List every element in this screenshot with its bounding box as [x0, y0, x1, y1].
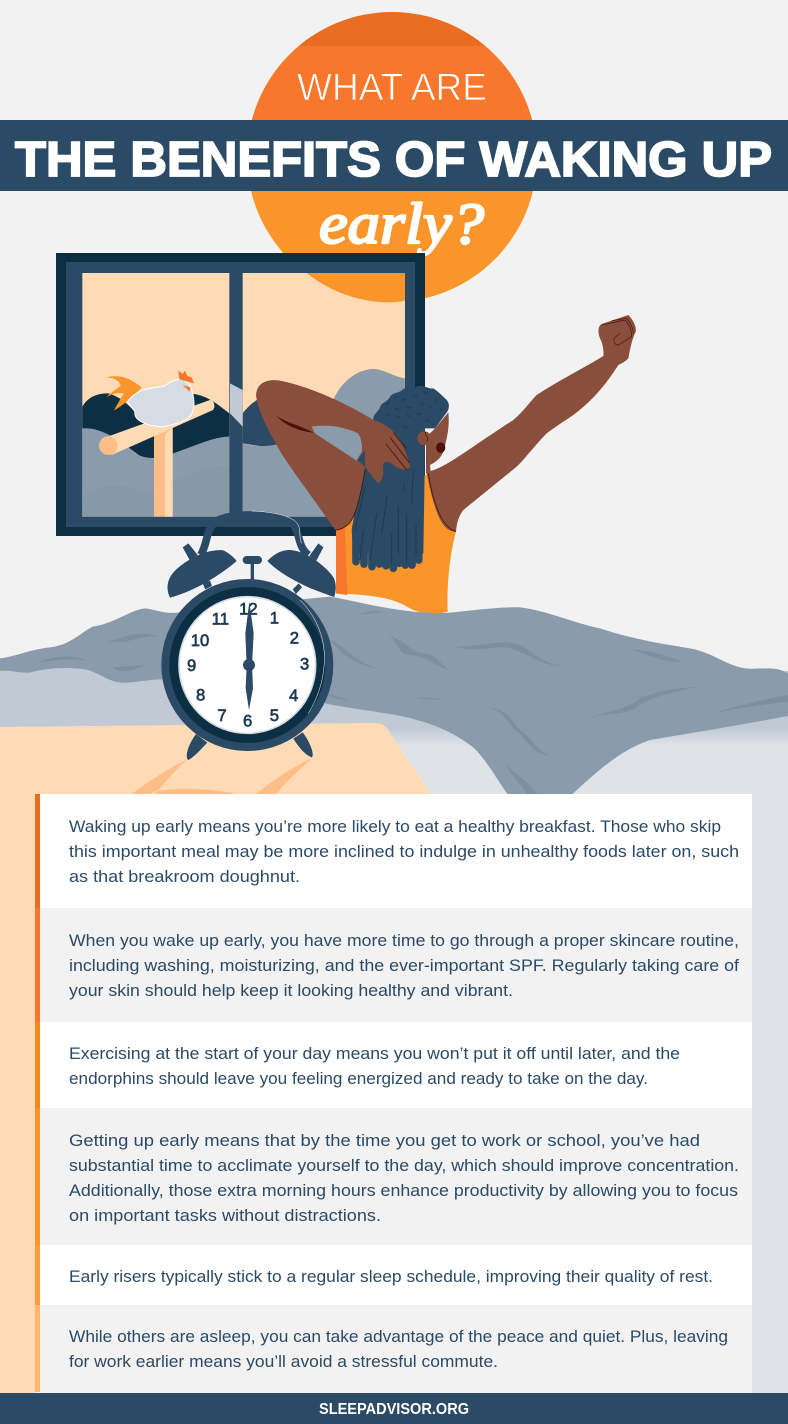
- raised arm: [427, 315, 636, 532]
- rooster: [106, 371, 194, 427]
- clock numbers: 2: [290, 628, 299, 647]
- clock numbers: 11: [212, 609, 229, 628]
- clock numbers: 10: [191, 631, 209, 650]
- panel: exercise: endorphins should leave you feeling energized and ready to take on the day.: [69, 1069, 648, 1088]
- perch: [99, 400, 214, 517]
- face: [417, 412, 449, 473]
- side strips: [0, 794, 788, 1394]
- clock body: [161, 579, 333, 751]
- clock numbers: 6: [243, 712, 252, 731]
- clock hands: [243, 602, 255, 710]
- panel: skincare: [35, 908, 752, 1022]
- panel: skincare: When you wake up early, you have more time to go through a proper skincare routine,: [69, 931, 739, 950]
- clock numbers: 1: [270, 608, 279, 627]
- panel: skincare: including washing, moisturizing, and the ever-important SPF. Regularly taking care of: [69, 956, 739, 975]
- panel: peace and quiet: for work earlier means you’ll avoid a stressful commute.: [69, 1352, 498, 1371]
- clock numbers: 7: [217, 706, 227, 725]
- panel: concentration: Getting up early means that by the time you get to work or school, you’ve had: [69, 1131, 700, 1150]
- panel: peace and quiet: While others are asleep, you can take advantage of the peace and quiet. Plus, leaving: [69, 1327, 728, 1346]
- sun through window: [307, 273, 405, 302]
- alarm clock: [132, 511, 336, 794]
- panel: sleep schedule: [35, 1245, 752, 1305]
- mullion: [229, 273, 243, 518]
- feet: [187, 732, 313, 760]
- clock numbers: 4: [289, 686, 298, 705]
- bells: [168, 543, 336, 760]
- clock numbers: [187, 599, 309, 731]
- footer: SLEEPADVISOR.ORG: [319, 1401, 469, 1418]
- panel: concentration: substantial time to acclimate yourself to the day, which should improve concentration.: [69, 1156, 739, 1175]
- panel: breakfast: [35, 794, 752, 908]
- bent arm: [256, 380, 410, 530]
- panel: concentration: [35, 1108, 752, 1245]
- panel: breakfast: Waking up early means you’re more likely to eat a healthy breakfast. Those who skip: [69, 817, 721, 836]
- heading: what are: WHAT ARE: [297, 67, 487, 109]
- clock shadows: [132, 758, 312, 794]
- footer: [0, 1393, 788, 1424]
- panel: exercise: Exercising at the start of your day means you won’t put it off until later, and the: [69, 1044, 680, 1063]
- clock numbers: 3: [300, 654, 309, 673]
- panel: exercise: [35, 1022, 752, 1108]
- panel: breakfast: this important meal may be more inclined to indulge in unhealthy foods later on, such: [69, 842, 739, 861]
- hills: [82, 369, 405, 517]
- handle: [201, 515, 308, 555]
- panel: concentration: Additionally, those extra morning hours enhance productivity by allowing you to focus: [69, 1181, 738, 1200]
- window: [56, 253, 425, 536]
- clock numbers: 5: [270, 706, 279, 725]
- panel: breakfast: as that breakroom doughnut.: [69, 867, 300, 886]
- window sky: [82, 273, 405, 517]
- title: THE BENEFITS OF WAKING UP: [15, 133, 772, 187]
- clock numbers: 9: [187, 656, 196, 675]
- blanket: [0, 597, 788, 794]
- hair: [352, 386, 449, 568]
- panel: concentration: on important tasks without distractions.: [69, 1206, 381, 1225]
- heading: early: early?: [319, 191, 484, 256]
- panel: skincare: your skin should help keep it looking healthy and vibrant.: [69, 981, 513, 1000]
- panel: peace and quiet: [35, 1305, 752, 1392]
- clock numbers: 12: [239, 599, 258, 618]
- floor and back bedding: [0, 664, 788, 794]
- clock highlight: [252, 511, 334, 713]
- panel: sleep schedule: Early risers typically stick to a regular sleep schedule, improving their quality of rest.: [69, 1267, 713, 1286]
- blanket folds: [38, 611, 788, 794]
- tank top: [336, 473, 456, 614]
- woman: [256, 315, 636, 614]
- clock numbers: 8: [196, 685, 205, 704]
- arm outline: [428, 473, 456, 532]
- sun circle: [251, 12, 533, 298]
- fist lines: [602, 318, 633, 345]
- title band: [0, 120, 788, 191]
- table: [0, 723, 431, 794]
